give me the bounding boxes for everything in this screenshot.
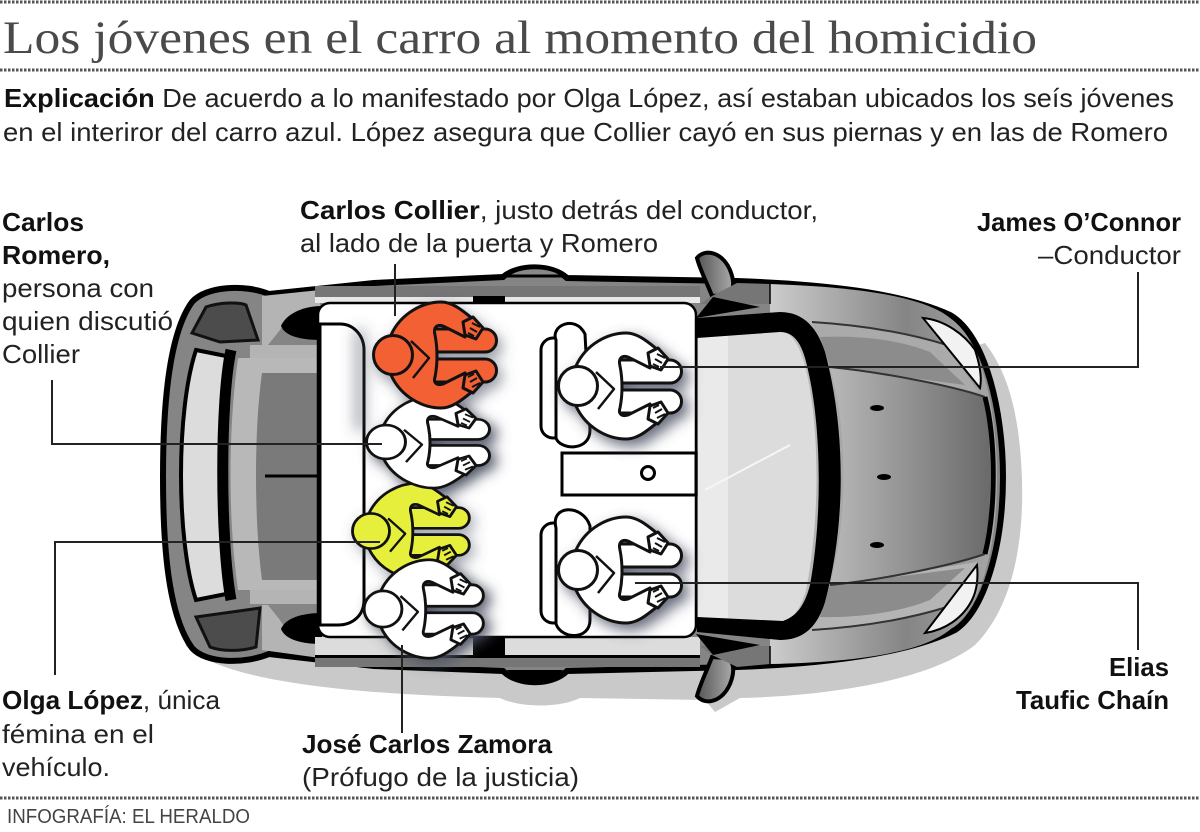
- explanation text: [3, 83, 1174, 147]
- label: Carlos Collier: al lado de la puerta y Romero: [300, 228, 658, 258]
- label: Elias Taufic Chaín: [1016, 652, 1169, 715]
- hood: [830, 367, 990, 585]
- label: José Carlos Zamora: José Carlos Zamora: [302, 729, 553, 759]
- top dotted rule: [0, 0, 1200, 4]
- label: Carlos Collier: Carlos Collier , justo detrás del conductor,: [300, 195, 818, 225]
- label: Carlos Romero: Carlos: [2, 207, 84, 237]
- center console: [562, 453, 696, 495]
- front seat right: [541, 510, 590, 636]
- person: José Carlos Zamora: [364, 560, 483, 658]
- person: James O'Connor, driver: [558, 333, 682, 439]
- label: Olga López: Olga López, única: [2, 685, 221, 715]
- rear hatch: [230, 358, 320, 590]
- label: Olga López: vehículo.: [2, 752, 110, 782]
- dotted rule under title: [0, 68, 1200, 72]
- label: Carlos Romero: Romero,: [2, 240, 110, 270]
- rear window frame: [223, 350, 231, 600]
- label: Olga López: [2, 685, 221, 782]
- label: José Carlos Zamora: [302, 729, 579, 792]
- label: Elias Taufic Chaín: Taufic Chaín: [1016, 685, 1169, 715]
- rear window: [181, 350, 231, 600]
- label: Carlos Romero: [2, 207, 173, 369]
- label: Olga López: fémina en el: [2, 719, 154, 749]
- wiper nozzles: [870, 405, 891, 548]
- leader lines: [52, 264, 1138, 733]
- mirrors: [697, 253, 733, 701]
- windshield: [698, 330, 816, 622]
- rear bench seat: [320, 324, 364, 625]
- person: Olga López (yellow): [352, 483, 469, 579]
- side sills: [315, 286, 700, 667]
- explanation text: Explicación De acuerdo a lo manifestado por Olga López, así estaban ubicados los seís jóvenes: [4, 83, 1174, 113]
- label: Carlos Collier: [300, 195, 818, 258]
- cabin floor: [318, 303, 696, 637]
- label: James O'Connor: James O’Connor: [977, 207, 1181, 237]
- rear lights: [192, 303, 260, 650]
- wheel wells: [281, 306, 322, 644]
- explanation text: en el interiror del carro azul. López asegura que Collier cayó en sus piernas y en las de Romero: [3, 117, 1168, 147]
- label: James O'Connor: –Conductor: [1038, 240, 1181, 270]
- label: José Carlos Zamora: (Prófugo de la justicia): [302, 762, 579, 792]
- car body: [163, 267, 1003, 682]
- bottom dotted rule: [0, 796, 1200, 800]
- person: Elias Taufic Chaín: [558, 517, 682, 623]
- front seat left: [541, 323, 590, 447]
- door handles: [507, 268, 563, 276]
- credit: INFOGRAFÍA: EL HERALDO: [7, 805, 250, 828]
- label: Carlos Romero: Collier: [2, 339, 80, 369]
- label: Carlos Romero: quien discutió: [2, 306, 173, 336]
- car shadow: [185, 343, 1022, 712]
- person shadows: [355, 308, 688, 662]
- title: Los jóvenes en el carro al momento del homicidio: [3, 12, 1037, 64]
- person: Carlos Romero: [366, 396, 490, 488]
- car illustration: [163, 253, 1022, 712]
- label: Carlos Romero: persona con: [2, 273, 154, 303]
- label: James O'Connor: [977, 207, 1181, 270]
- headlights: [923, 318, 981, 633]
- label: Elias Taufic Chaín: Elias: [1109, 652, 1169, 682]
- rear light-gray body panels: [250, 290, 320, 658]
- person: Carlos Collier (red): [374, 302, 496, 408]
- front side panels: [696, 283, 997, 667]
